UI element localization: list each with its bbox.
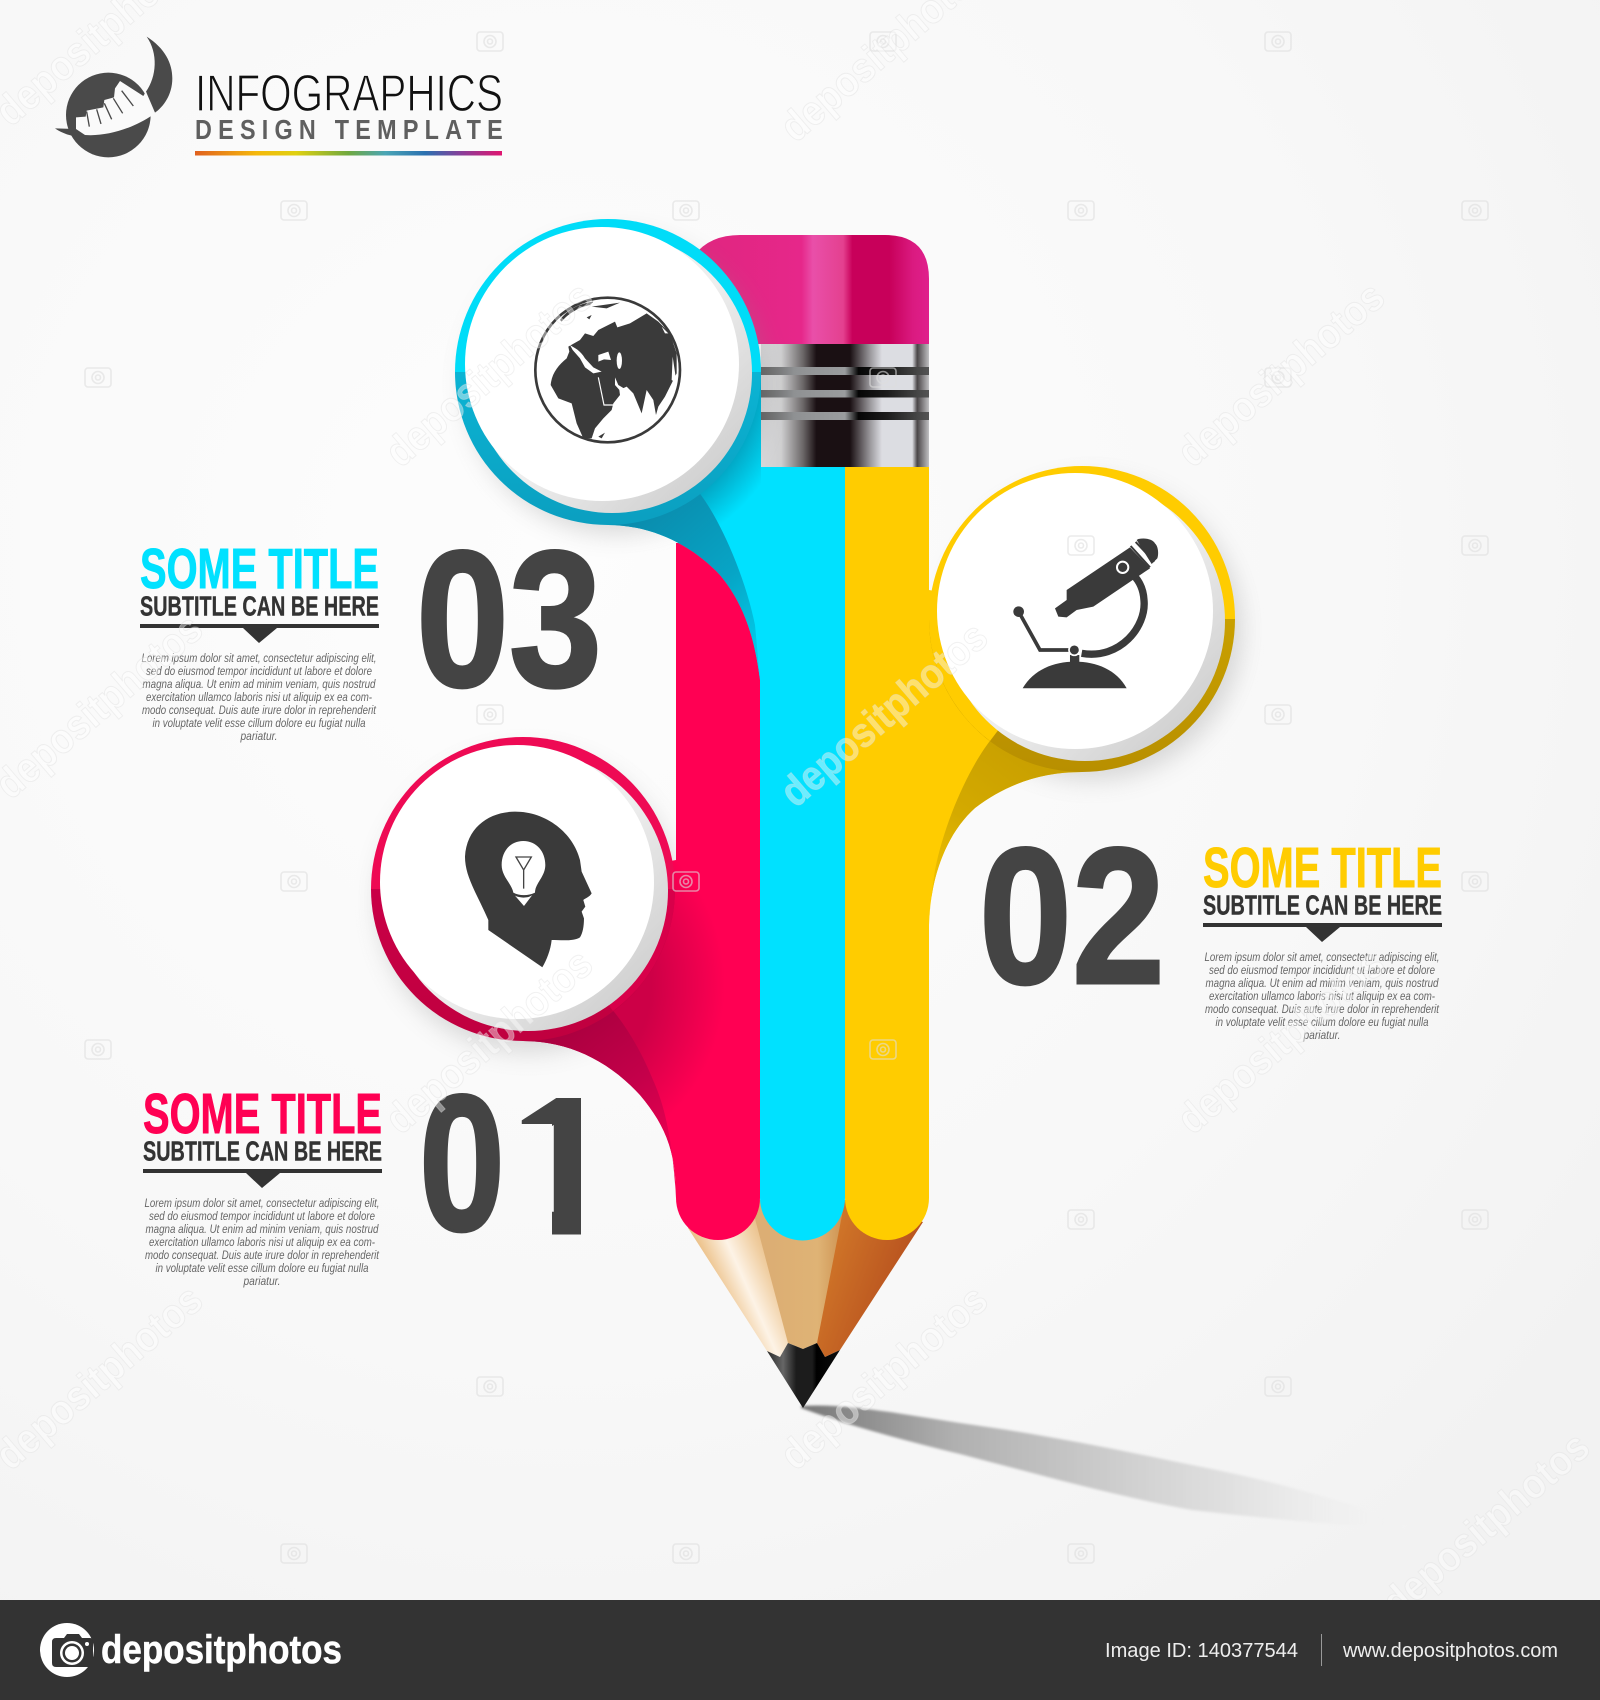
text block 01: [143, 1082, 382, 1288]
logo title text: DESIGN TEMPLATE: [195, 115, 503, 145]
body text 03: sed do eiusmod tempor incididunt ut labore et dolore: [146, 664, 372, 678]
body text 02: magna aliqua. Ut enim ad minim veniam, quis nostrud: [1206, 976, 1439, 990]
body text 01: pariatur.: [243, 1274, 280, 1288]
body text 03: magna aliqua. Ut enim ad minim veniam, quis nostrud: [142, 677, 376, 691]
body text 02: modo consequat. Duis aute irure dolor in reprehenderit: [1205, 1002, 1440, 1016]
divider with pointer 02: [1203, 923, 1442, 942]
watermark text: depositphotos: [771, 1275, 996, 1479]
body text 03: pariatur.: [240, 729, 278, 743]
pencil body red column with tail: [523, 543, 760, 1240]
pencil stroke shadow: [801, 1405, 1420, 1530]
body text 03: in voluptate velit esse cillum dolore eu fugiat nulla: [152, 716, 366, 730]
icon: depositphotos camera: [40, 1623, 94, 1677]
eraser: [690, 235, 929, 344]
watermark text: depositphotos: [376, 272, 601, 476]
footer brand: depositphotos: [101, 1628, 342, 1672]
graphite lead: [767, 1343, 840, 1408]
image id: Image ID: 140377544: [1105, 1640, 1298, 1662]
body text 01: sed do eiusmod tempor incididunt ut labore et dolore: [149, 1209, 375, 1223]
circle 03 with globe icon: [455, 219, 761, 525]
watermark cameras: [85, 32, 1488, 1563]
title 01: SOME TITLE: [143, 1082, 382, 1146]
watermark text: depositphotos: [376, 939, 601, 1143]
wood right face: [817, 1200, 923, 1357]
body text 01: Lorem ipsum dolor sit amet, consectetur adipiscing elit,: [144, 1196, 380, 1210]
number 01: [424, 1093, 581, 1234]
body text 02: sed do eiusmod tempor incididunt ut labore et dolore: [1209, 963, 1435, 977]
watermark text: depositphotos: [1168, 272, 1393, 476]
title 03: SOME TITLE: [140, 537, 379, 601]
subtitle 03: SUBTITLE CAN BE HERE: [140, 590, 379, 622]
text block 02: [1203, 836, 1442, 1042]
drop shadows of circles: [378, 234, 1242, 1052]
body text 02: exercitation ullamco laboris nisi ut aliquip ex ea com-: [1209, 989, 1435, 1003]
body text 03: modo consequat. Duis aute irure dolor in reprehenderit: [142, 703, 377, 717]
subtitle 01: SUBTITLE CAN BE HERE: [143, 1136, 382, 1166]
body text 03: [142, 651, 377, 743]
website: www.depositphotos.com: [1342, 1640, 1558, 1662]
body text 03: Lorem ipsum dolor sit amet, consectetur adipiscing elit,: [142, 651, 376, 665]
number 03: 03: [416, 511, 602, 728]
body text 01: modo consequat. Duis aute irure dolor in reprehenderit: [145, 1248, 380, 1262]
body text 01: [144, 1196, 380, 1288]
body text 03: exercitation ullamco laboris nisi ut aliquip ex ea com-: [146, 690, 372, 704]
watermark text: depositphotos: [1168, 939, 1393, 1143]
body text 01: exercitation ullamco laboris nisi ut aliquip ex ea com-: [149, 1235, 375, 1249]
watermark text: depositphotos: [771, 612, 996, 816]
title 02: SOME TITLE: [1203, 836, 1442, 900]
number 02: 02: [979, 808, 1165, 1025]
circle 01 with head icon: [371, 737, 675, 1041]
body text 02: in voluptate velit esse cillum dolore eu fugiat nulla: [1216, 1015, 1429, 1029]
logo title text: INFOGRAPHICS: [195, 65, 503, 123]
pencil body yellow column with tail: [845, 467, 1082, 1240]
logo title text: [195, 65, 503, 156]
body text 02: [1204, 950, 1440, 1042]
subtitle 02: SUBTITLE CAN BE HERE: [1203, 890, 1442, 920]
icon: microscope: [1013, 538, 1158, 688]
divider with pointer 03: [140, 624, 379, 643]
circle 02 with microscope icon: [929, 466, 1235, 772]
brand logo with ruler: [55, 37, 172, 157]
wood left face: [688, 1200, 790, 1357]
wood middle face: [750, 1200, 860, 1349]
divider with pointer 01: [143, 1169, 382, 1188]
number 01: 0: [419, 1055, 505, 1272]
number 01: 1: [510, 1058, 618, 1275]
icon: head with light bulb: [465, 812, 592, 967]
body text 01: in voluptate velit esse cillum dolore eu fugiat nulla: [156, 1261, 369, 1275]
footer bar: [0, 1600, 1600, 1700]
text block 03: [140, 537, 379, 743]
body text 02: pariatur.: [1303, 1028, 1340, 1042]
pencil body cyan column with tail: [608, 372, 845, 1240]
pencil tip: [688, 1200, 923, 1408]
body text 02: Lorem ipsum dolor sit amet, consectetur adipiscing elit,: [1204, 950, 1440, 964]
body text 01: magna aliqua. Ut enim ad minim veniam, quis nostrud: [146, 1222, 379, 1236]
metal ferrule: [761, 344, 929, 467]
icon: globe: [535, 298, 680, 442]
